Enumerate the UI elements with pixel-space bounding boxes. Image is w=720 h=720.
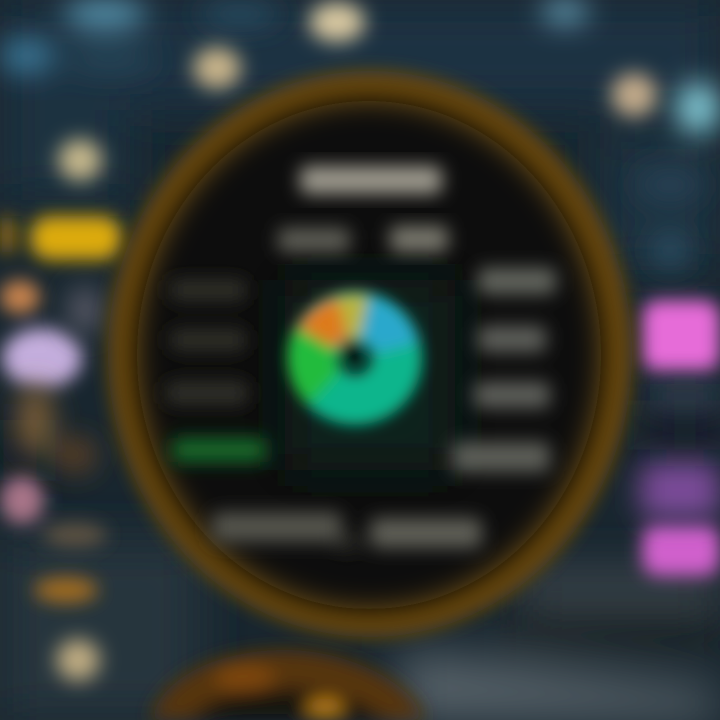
- left labels column: [166, 280, 266, 462]
- magnifier handle: [150, 650, 425, 720]
- footer text: blurred labels: [212, 512, 482, 551]
- lens interior glow: [285, 280, 455, 470]
- right labels column: [452, 268, 556, 472]
- green label: [172, 438, 266, 462]
- segment: green: [311, 338, 325, 388]
- segment: yellow: [343, 316, 364, 318]
- donut chart: [311, 316, 397, 400]
- segment: blue: [364, 317, 396, 348]
- donut hole: [340, 339, 364, 363]
- subtitle text: blurred subheading: [278, 226, 448, 252]
- title text: blurred heading: [300, 166, 442, 194]
- lights on the right edge: [640, 300, 720, 576]
- yellow pill: [30, 216, 122, 260]
- segment: orange: [316, 318, 343, 338]
- magnifier lens ring: [108, 71, 632, 637]
- lights on the left edge: [0, 216, 122, 603]
